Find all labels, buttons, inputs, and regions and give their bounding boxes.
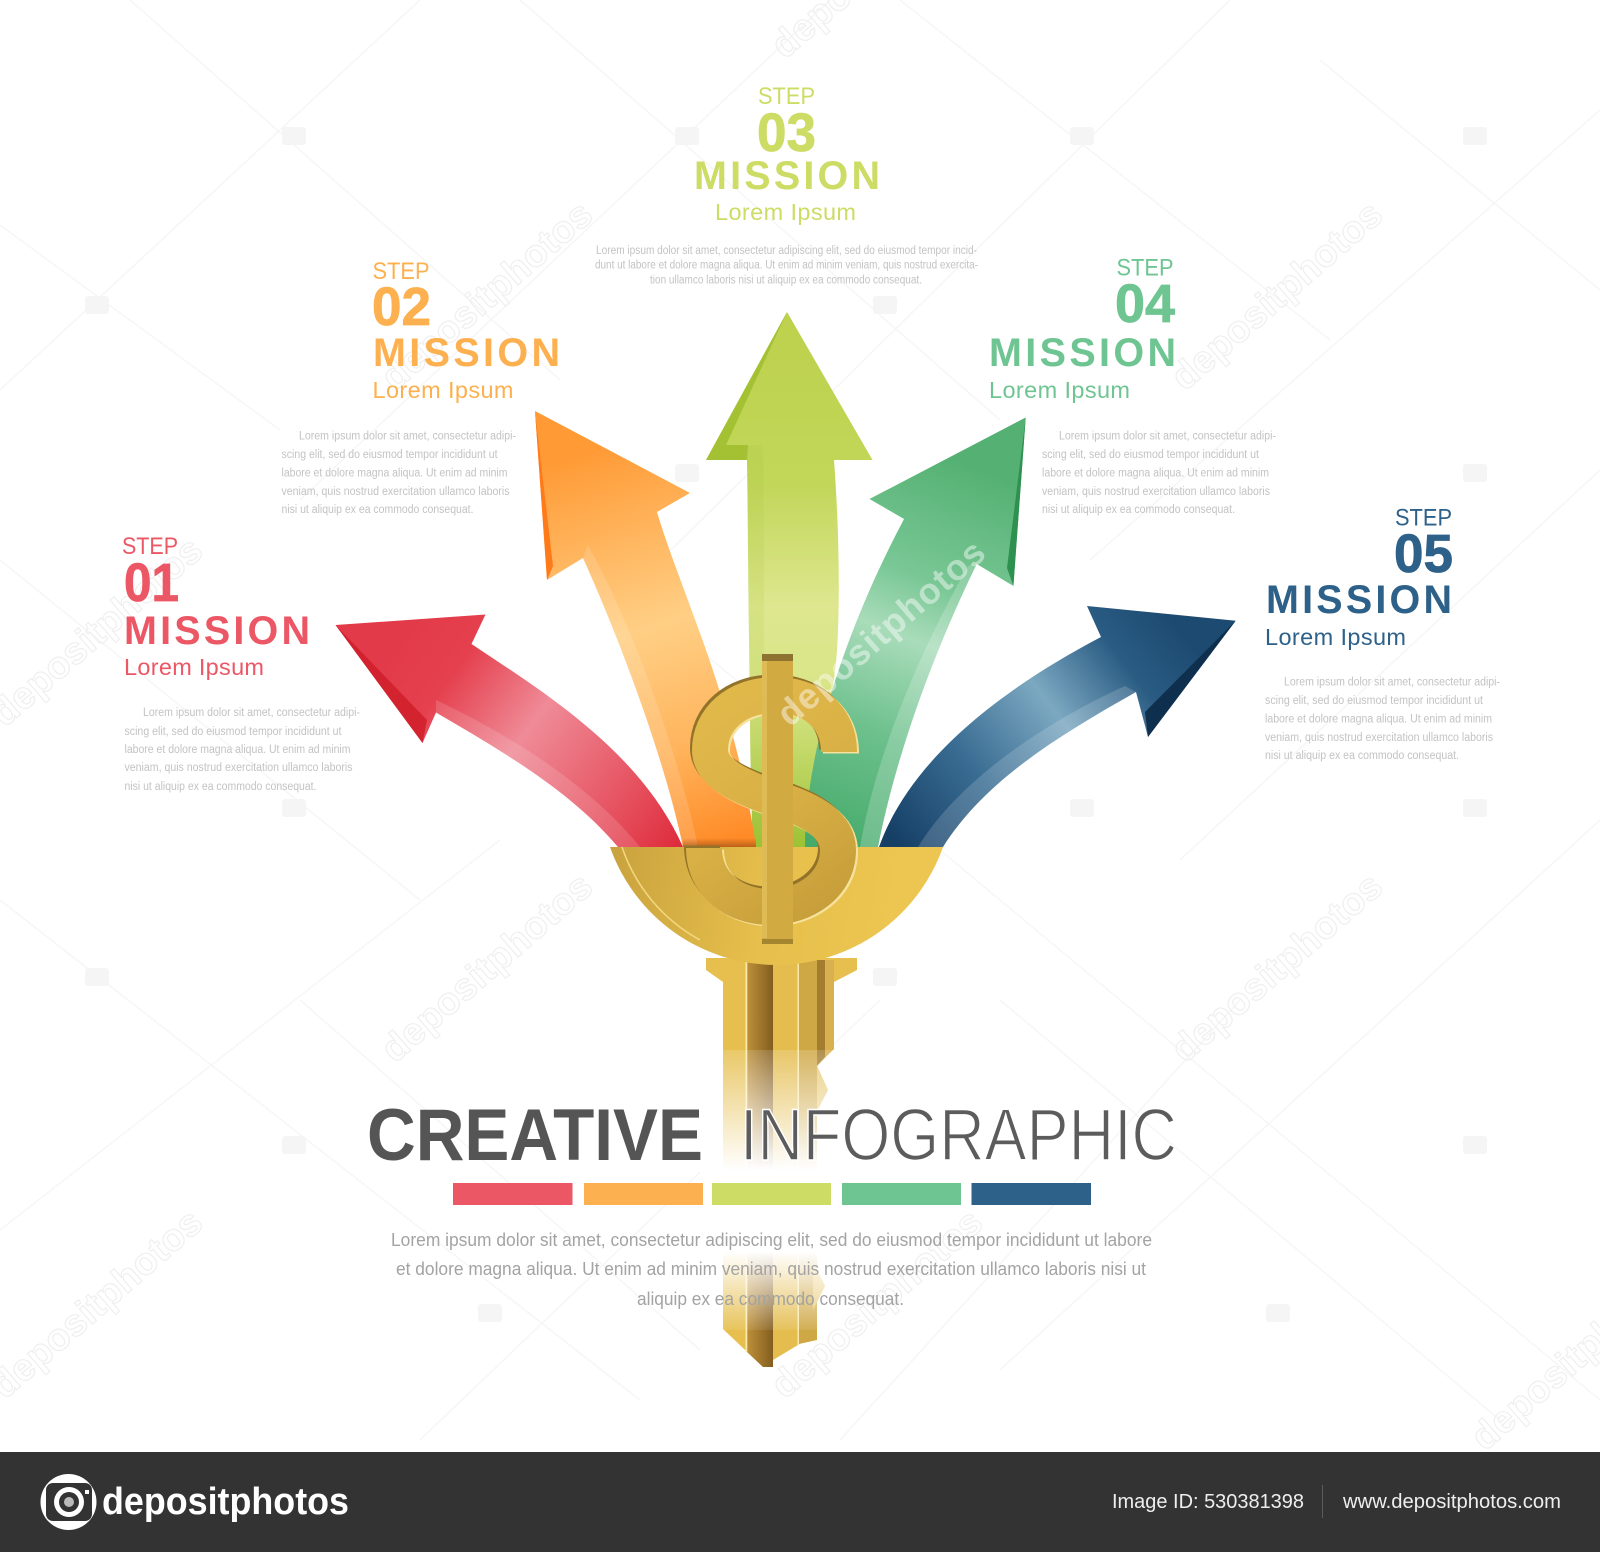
key bowl	[610, 847, 943, 965]
step 4 label: STEP	[1116, 254, 1174, 281]
description paragraph: Lorem ipsum dolor sit amet, consectetur adipiscing elit, sed do eiusmod tempor incididunt ut labore	[391, 1229, 1152, 1250]
step 4 mission heading: MISSION	[989, 331, 1176, 375]
watermark pattern: depositphotos	[373, 193, 601, 399]
step 5 number: 05	[1394, 524, 1453, 584]
step 3 paragraph: Lorem ipsum dolor sit amet, consectetur adipiscing elit, sed do eiusmod tempor incid-	[596, 245, 977, 257]
step 5 paragraph: Lorem ipsum dolor sit amet, consectetur adipi-	[1284, 677, 1500, 689]
step 3 label: STEP	[758, 83, 815, 110]
step 2 paragraph	[282, 431, 516, 516]
step 4 block	[989, 254, 1276, 516]
step 1 paragraph: Lorem ipsum dolor sit amet, consectetur adipi-	[143, 707, 360, 719]
step 2 number: 02	[372, 277, 431, 337]
step 5 paragraph: veniam, quis nostrud exercitation ullamco laboris	[1265, 732, 1493, 744]
step 3 paragraph: tion ullamco laboris nisi ut aliquip ex ea commodo consequat.	[650, 275, 922, 287]
title	[367, 1095, 1177, 1176]
colour legend bars	[453, 1183, 1091, 1205]
footer bar	[0, 1452, 1600, 1552]
step 3 number: 03	[757, 103, 816, 163]
step 5 subtitle: Lorem Ipsum	[1265, 624, 1406, 650]
arrow 2: orange	[535, 411, 756, 847]
step 2 paragraph: nisi ut aliquip ex ea commodo consequat.	[282, 504, 474, 516]
step 5 paragraph: scing elit, sed do eiusmod tempor incididunt ut	[1265, 695, 1484, 707]
step 5 block	[1265, 504, 1500, 762]
step 4 paragraph: nisi ut aliquip ex ea commodo consequat.	[1042, 504, 1235, 516]
watermark over green arrow: depositphotos	[768, 531, 993, 734]
icon: camera logo	[40, 1474, 96, 1530]
key blade	[706, 958, 857, 1367]
step 1 number: 01	[124, 553, 179, 613]
description paragraph	[391, 1229, 1152, 1309]
step 3 mission heading: MISSION	[694, 154, 880, 198]
step 2 paragraph: Lorem ipsum dolor sit amet, consectetur adipi-	[299, 431, 516, 443]
step 1 paragraph: scing elit, sed do eiusmod tempor incididunt ut	[124, 726, 342, 738]
fade overlay on key blade	[700, 1050, 840, 1330]
step 2 block	[282, 258, 560, 516]
watermark pattern: depositphotos	[1163, 865, 1391, 1071]
step 1 subtitle: Lorem Ipsum	[124, 654, 264, 680]
watermark pattern: depositphotos	[1163, 193, 1391, 399]
step 3 block	[595, 83, 978, 287]
title: INFOGRAPHIC	[740, 1095, 1177, 1176]
step 2 label: STEP	[372, 258, 430, 285]
step 4 paragraph	[1042, 431, 1276, 516]
step 3 paragraph	[595, 245, 978, 287]
website: www.depositphotos.com	[1342, 1491, 1561, 1513]
step 1 paragraph: labore et dolore magna aliqua. Ut enim ad minim	[124, 744, 350, 756]
step 4 paragraph: scing elit, sed do eiusmod tempor incididunt ut	[1042, 449, 1260, 461]
step 2 paragraph: labore et dolore magna aliqua. Ut enim ad minim	[282, 467, 508, 479]
step 1 paragraph	[124, 707, 360, 793]
description paragraph: et dolore magna aliqua. Ut enim ad minim veniam, quis nostrud exercitation ullamco laboris nisi ut	[396, 1258, 1146, 1279]
description paragraph: aliquip ex ea commodo consequat.	[637, 1288, 904, 1309]
step 1 label: STEP	[122, 533, 178, 560]
brand name: depositphotos	[102, 1481, 349, 1523]
golden key	[610, 847, 943, 1367]
step 2 mission heading: MISSION	[373, 331, 560, 375]
icon: dollar sign	[702, 654, 841, 944]
arrow 5: blue	[879, 606, 1236, 847]
step 4 paragraph: Lorem ipsum dolor sit amet, consectetur adipi-	[1059, 431, 1276, 443]
step 4 subtitle: Lorem Ipsum	[989, 377, 1130, 403]
arrow 3: lime	[706, 312, 872, 847]
step 4 paragraph: veniam, quis nostrud exercitation ullamco laboris	[1042, 486, 1270, 498]
step 3 subtitle: Lorem Ipsum	[715, 199, 856, 225]
step 5 label: STEP	[1395, 504, 1452, 531]
step 1 paragraph: veniam, quis nostrud exercitation ullamco laboris	[124, 762, 353, 774]
title: CREATIVE	[367, 1095, 703, 1176]
step 5 mission heading: MISSION	[1266, 578, 1452, 622]
step 1 paragraph: nisi ut aliquip ex ea commodo consequat.	[124, 781, 316, 793]
step 4 number: 04	[1115, 274, 1175, 334]
step 5 paragraph: labore et dolore magna aliqua. Ut enim ad minim	[1265, 713, 1492, 725]
arrow 4: green	[805, 418, 1026, 847]
step 1 mission heading: MISSION	[124, 609, 310, 653]
image id: Image ID: 530381398	[1112, 1491, 1304, 1513]
step 5 paragraph: nisi ut aliquip ex ea commodo consequat.	[1265, 750, 1459, 762]
arrows fan	[336, 312, 1236, 847]
watermark pattern: depositphotos	[763, 1201, 991, 1407]
watermark pattern: depositphotos	[373, 865, 601, 1071]
step 5 paragraph	[1265, 677, 1500, 762]
step 2 paragraph: scing elit, sed do eiusmod tempor incididunt ut	[282, 449, 498, 461]
step 3 paragraph: dunt ut labore et dolore magna aliqua. Ut enim ad minim veniam, quis nostrud exercita-	[595, 260, 978, 272]
step 2 paragraph: veniam, quis nostrud exercitation ullamco laboris	[282, 486, 510, 498]
step 2 subtitle: Lorem Ipsum	[372, 377, 514, 403]
step 1 block	[122, 533, 360, 793]
arrow 1: red	[336, 614, 683, 847]
step 4 paragraph: labore et dolore magna aliqua. Ut enim ad minim	[1042, 467, 1269, 479]
